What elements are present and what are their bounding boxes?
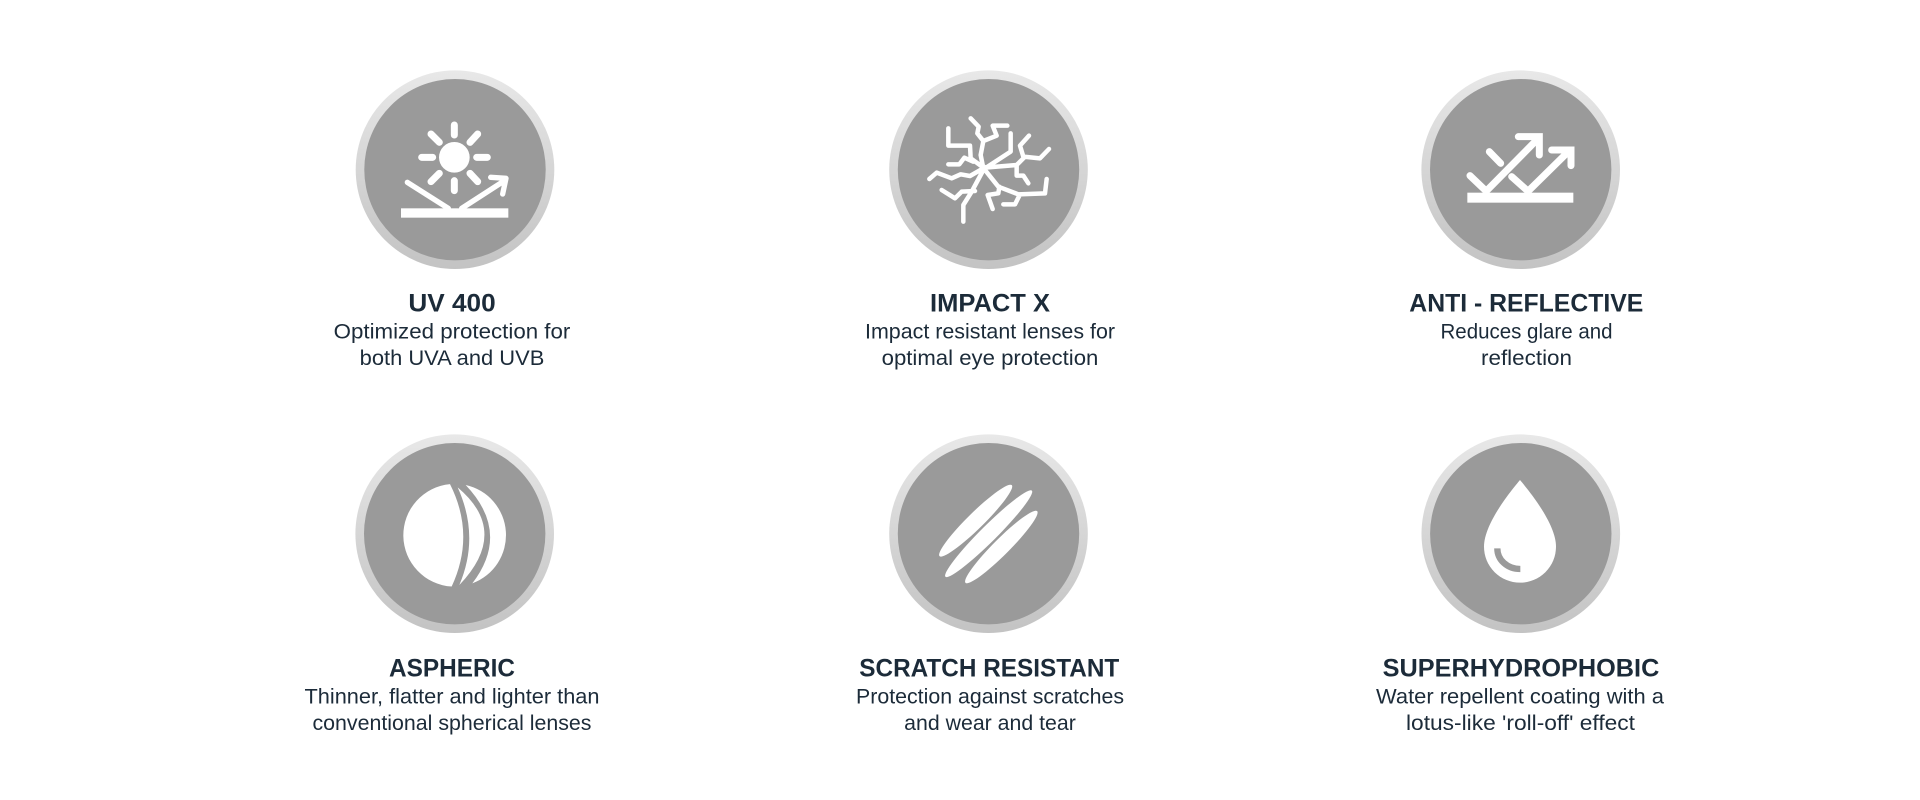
panel: Superhydrophobic: [1376, 434, 1664, 735]
description: Superhydrophobic: Water repellent coating with a: [1376, 684, 1664, 708]
panel: Aspheric: [304, 434, 600, 735]
panel: Impact X: [865, 70, 1115, 370]
icon badge ring: [889, 70, 1088, 269]
description: Impact X: [865, 320, 1115, 370]
heading: UV 400: UV 400: [408, 290, 496, 318]
description: UV 400: [334, 320, 570, 370]
icon badge disc: [364, 443, 545, 624]
icon: cracked lens: [929, 118, 1049, 222]
description: Anti-Reflective: reflection: [1481, 346, 1572, 370]
icon: reduced reflection arrows: [1467, 137, 1573, 203]
description: Anti-Reflective: Reduces glare and: [1440, 320, 1612, 344]
panel: UV 400: [334, 70, 570, 370]
icon badge disc: [1430, 79, 1611, 260]
description: Impact X: optimal eye protection: [882, 346, 1098, 370]
icon badge disc: [1430, 443, 1612, 624]
icon: water drop: [1484, 480, 1556, 583]
heading: Superhydrophobic: SUPERHYDROPHOBIC: [1383, 655, 1659, 683]
icon badge disc: [898, 443, 1079, 624]
description: Scratch Resistant: [856, 684, 1124, 735]
description: Scratch Resistant: and wear and tear: [904, 711, 1076, 735]
panel: Scratch Resistant: [856, 434, 1124, 735]
description: Aspheric: conventional spherical lenses: [312, 711, 592, 735]
icon badge disc: [364, 79, 546, 260]
heading: Aspheric: ASPHERIC: [389, 655, 515, 683]
icon badge ring: [355, 434, 554, 633]
icon: sun reflecting off surface: [401, 125, 508, 218]
description: UV 400: Optimized protection for: [334, 320, 570, 344]
description: Impact X: Impact resistant lenses for: [865, 320, 1115, 344]
icon: aspheric lens profile: [403, 484, 506, 587]
icon badge disc: [898, 79, 1079, 260]
icon: scratches: [934, 479, 1043, 588]
description: UV 400: both UVA and UVB: [360, 346, 544, 370]
heading: Scratch Resistant: SCRATCH RESISTANT: [859, 655, 1119, 683]
icon badge ring: [1422, 434, 1620, 633]
description: Superhydrophobic: lotus-like 'roll-off' effect: [1406, 711, 1635, 735]
icon badge ring: [1421, 70, 1620, 269]
panel: Anti-Reflective: [1409, 70, 1643, 370]
heading: Impact X: IMPACT X: [930, 290, 1050, 318]
icon badge ring: [889, 434, 1088, 633]
description: Aspheric: Thinner, flatter and lighter than: [304, 684, 600, 708]
icon badge ring: [356, 70, 554, 269]
heading: Anti-Reflective: ANTI - REFLECTIVE: [1409, 290, 1643, 318]
description: Anti-Reflective: [1440, 320, 1612, 370]
description: Aspheric: [304, 684, 600, 735]
description: Superhydrophobic: [1376, 684, 1664, 735]
description: Scratch Resistant: Protection against scratches: [856, 684, 1124, 708]
